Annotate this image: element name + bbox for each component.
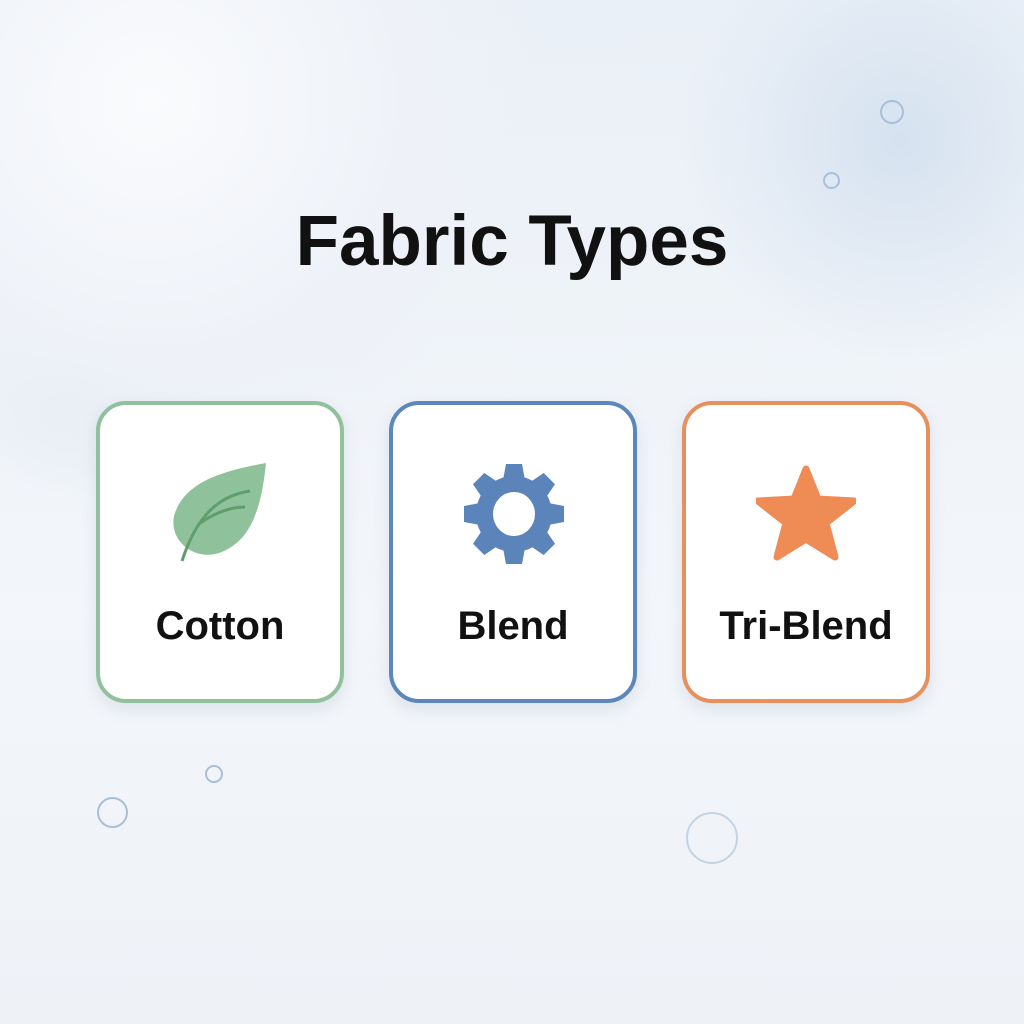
label: cotton: Cotton <box>156 604 284 648</box>
icon: star <box>756 466 856 560</box>
panel: blend <box>389 401 637 703</box>
label: tri-blend: Tri-Blend <box>719 604 893 648</box>
icon: leaf <box>173 463 266 562</box>
icon: gear <box>464 464 564 564</box>
panel: cotton <box>96 401 344 703</box>
label: blend: Blend <box>457 604 569 648</box>
title: Fabric Types <box>296 202 728 281</box>
panel: tri-blend <box>682 401 930 703</box>
